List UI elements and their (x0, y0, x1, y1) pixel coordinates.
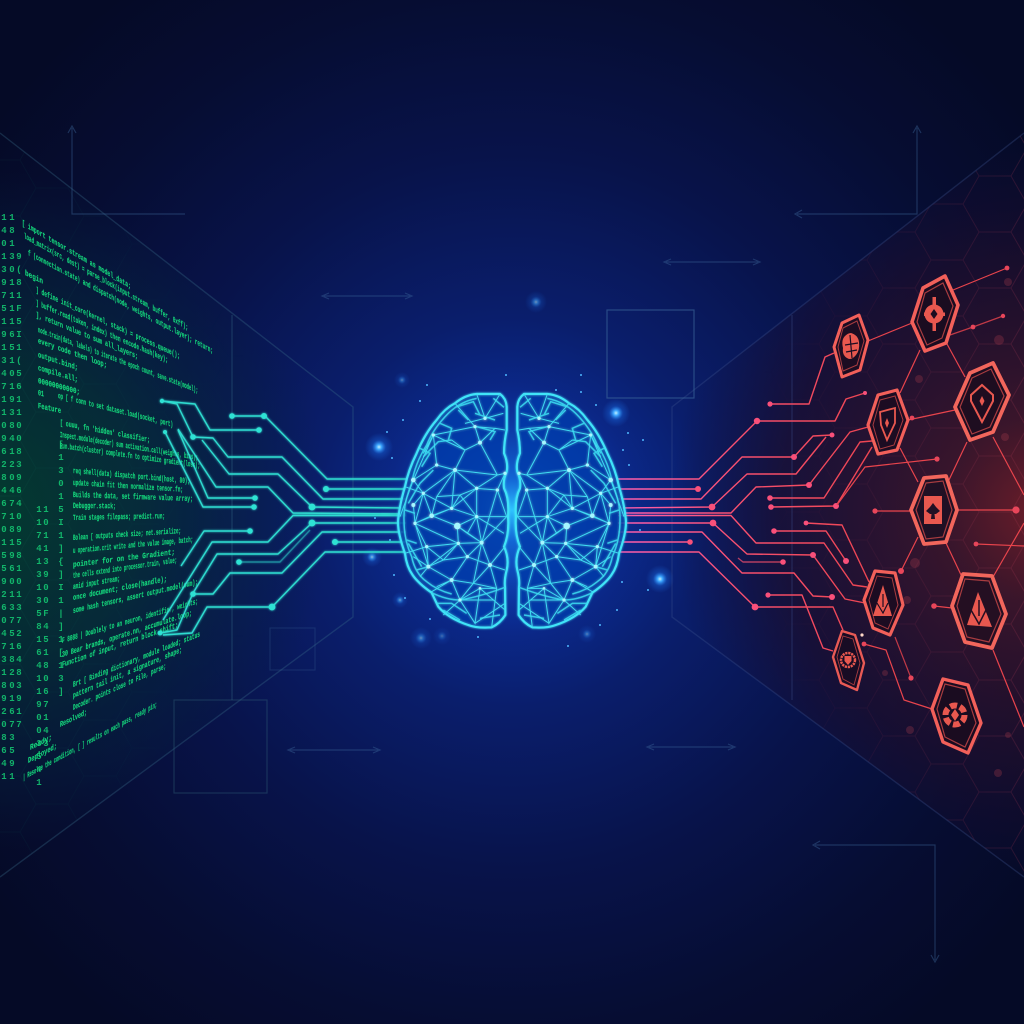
brain: right hemisphere (516, 394, 626, 628)
code text lines: load_matrix(src, dest) = parse_block(input.stream, buffer, 0xff); (24, 231, 188, 333)
icon: crosshair hexagon (912, 276, 958, 351)
code text lines: update chain fit then normalize tensor.fn; (73, 479, 183, 495)
code text lines: Debugger.stack; (73, 502, 116, 511)
icon: club square hexagon (911, 476, 957, 544)
code text lines: node.train(data, labels) to iterate the epoch count, save.state(model); (38, 325, 198, 396)
code text lines: u operation.crit write and the value image, batch; (73, 536, 193, 556)
decorative frames and arrows (68, 126, 939, 962)
code text lines: some hash tensors, assert output.model(sum); (73, 578, 198, 616)
code text lines: every code then loop; (38, 336, 107, 371)
icon: shield hexagon (868, 390, 908, 454)
code columns: 10113900F4518067143 (41, 505, 51, 752)
icon: pen shield hexagon (955, 363, 1009, 440)
panel: left code plane (0, 132, 354, 878)
code text lines: Resolved; (60, 708, 87, 730)
code text lines: output.bind; (38, 350, 78, 373)
code text lines: compile.all; (38, 363, 78, 385)
code text lines: | Resolve the condition, [ ] results on each pass, ready pin; (23, 700, 157, 783)
code text lines: ], return value to sum all_layers; (36, 310, 138, 362)
brain: left hemisphere (398, 394, 508, 628)
code text lines: Deployed; (28, 741, 57, 766)
icon: gear shield hexagon (833, 631, 864, 690)
code text lines: Function of input, return block.shift; (62, 620, 178, 670)
code text lines: 00000000000; (38, 377, 80, 397)
icon: warning hexagon small (864, 571, 903, 635)
icon: gear ring hexagon (932, 679, 981, 753)
code columns: 1174131358164119003541 (34, 505, 44, 791)
code text lines: Bolean [ outputs check size; net.serialize; (73, 527, 181, 543)
code text lines: f (connection.state) and dispatch(node, weights, output.layer); return; (28, 248, 213, 356)
code text lines: the cells extend into processor.train, value; (73, 556, 177, 581)
code text lines: F 8088 | Doublely to an neuron, identifier, weights; (62, 597, 198, 646)
icon: warning hexagon large (952, 574, 1006, 648)
panel: right threat plane (672, 132, 1024, 878)
code text lines: pattern tail init, a signature, shape; (73, 645, 182, 701)
code text lines: begin (25, 268, 43, 287)
code text lines: ] buffer.read(token, index) then encode.hash(key); (36, 298, 168, 365)
code text lines: 30 Bear brands, operate.nn, accumulate.loop; (62, 608, 192, 660)
code text lines: Brt [ Binding dictionary, module loaded; status (73, 630, 200, 690)
code text lines: amid input stream; (73, 575, 120, 592)
code text lines: Ready; (30, 733, 52, 753)
code text lines: ] define init_core(kernel, stack) = process.queue(); (36, 285, 180, 361)
brain core glow (387, 385, 637, 635)
hexagon icons (833, 276, 1009, 753)
code columns (0, 213, 66, 791)
code text lines: once document; close(handle); (73, 575, 167, 603)
code text lines: pointer for on the Gradient; (73, 548, 175, 570)
code columns: 18130111165101938412047181960137518201673591 (7, 213, 17, 785)
right trace nodes (687, 391, 867, 610)
code columns: [13015I1]{]I1|]1[13] (56, 440, 66, 700)
code text lines: Feature (38, 402, 61, 416)
code text lines: Inspect.module(decoder) sum activation.call(weights, bias); (60, 431, 198, 463)
threat network links (837, 266, 1024, 777)
code text lines: [ import tensor.stream as model_data; (22, 219, 131, 292)
right circuit traces (618, 353, 872, 651)
code text lines: Decoder. points close to File, parse; (73, 661, 166, 713)
left trace nodes (158, 399, 338, 635)
code text lines: req shell(data) dispatch port.bind(host, 80); (73, 467, 190, 486)
code text lines: op [ f conn to set dataset.load(socket, port) (58, 392, 173, 430)
code text lines: Run.batch(cluster) complete.fn to optimize gradient(loss); (60, 442, 200, 471)
code text lines: [ ouuu, fn 'hidden' classifier; (60, 419, 150, 445)
code columns: 9(81F5I1(5611008396409581013726483917 (14, 252, 24, 733)
code text lines: Builds the data, set firmware value array; (73, 491, 193, 504)
code text lines: Train stages filepass; predict.run; (73, 512, 165, 523)
code text lines: 01 (38, 389, 44, 399)
particles around brain (362, 291, 674, 649)
code text lines (22, 219, 213, 783)
left circuit traces (158, 399, 406, 635)
icon: brain hexagon (834, 315, 868, 377)
